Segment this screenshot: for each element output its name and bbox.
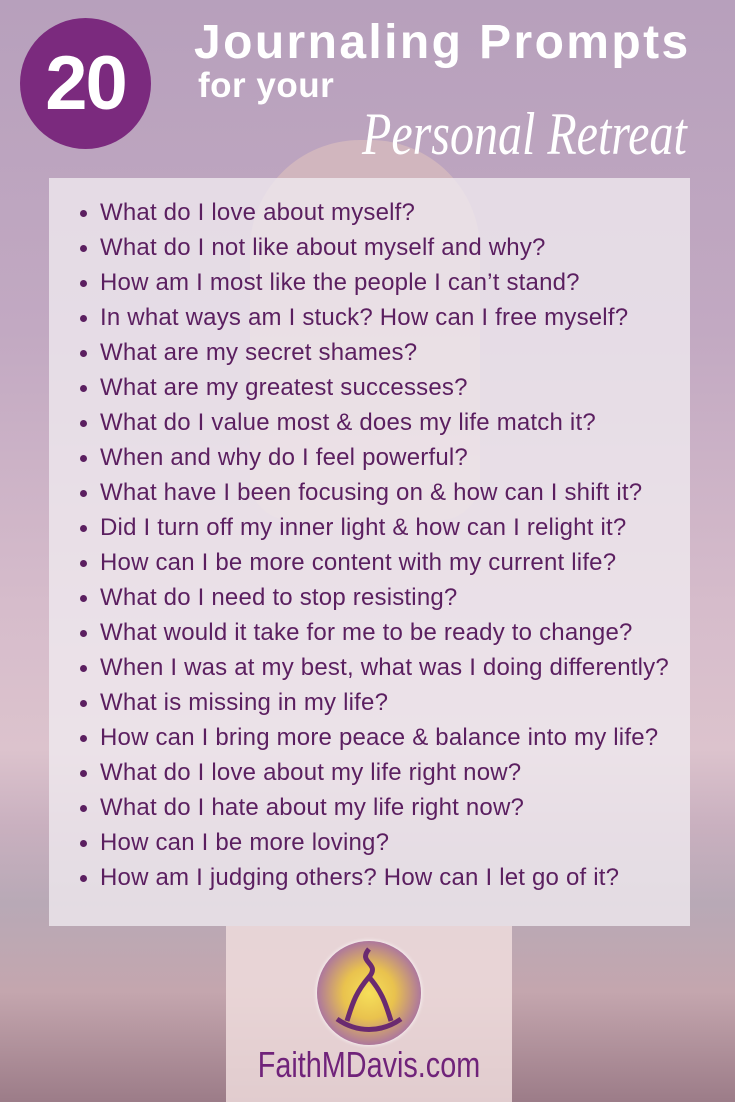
script title: Personal Retreat: Personal Retreat [362,101,687,167]
panel: prompts list [49,178,690,926]
panel: prompts list: What are my secret shames? [100,339,417,366]
badge: 20 [20,18,151,149]
panel: prompts list: How can I be more content with my current life? [100,549,616,576]
panel: prompts list: What do I value most & does my life match it? [100,409,596,436]
panel: prompts list: What do I love about myself? [100,199,415,226]
panel: prompts list: What is missing in my life? [100,689,388,716]
panel: prompts list: What would it take for me to be ready to change? [100,619,633,646]
panel: prompts list: What do I not like about myself and why? [100,234,546,261]
panel: prompts list: What do I love about my life right now? [100,759,521,786]
panel: prompts list: In what ways am I stuck? How can I free myself? [100,304,628,331]
footer box [226,926,512,1102]
panel: prompts list: How am I most like the people I can’t stand? [100,269,580,296]
panel: prompts list: What have I been focusing on & how can I shift it? [100,479,642,506]
panel: prompts list: How can I be more loving? [100,829,389,856]
panel: prompts list: How can I bring more peace & balance into my life? [100,724,658,751]
background figure silhouette [250,140,480,520]
panel: prompts list: When and why do I feel powerful? [100,444,468,471]
panel: prompts list: How am I judging others? How can I let go of it? [100,864,619,891]
panel: prompts list: Did I turn off my inner light & how can I relight it? [100,514,626,541]
icon: meditation logo [317,941,421,1045]
panel: prompts list: When I was at my best, what was I doing differently? [100,654,669,681]
title: Journaling Prompts [194,16,691,69]
panel: prompts list: What do I need to stop resisting? [100,584,457,611]
badge: 20: 20 [45,41,126,126]
footer text: website: FaithMDavis.com [258,1044,480,1085]
panel: prompts list: What are my greatest successes? [100,374,468,401]
panel: prompts list: What do I hate about my life right now? [100,794,524,821]
subtitle: for your: for your [198,66,334,105]
